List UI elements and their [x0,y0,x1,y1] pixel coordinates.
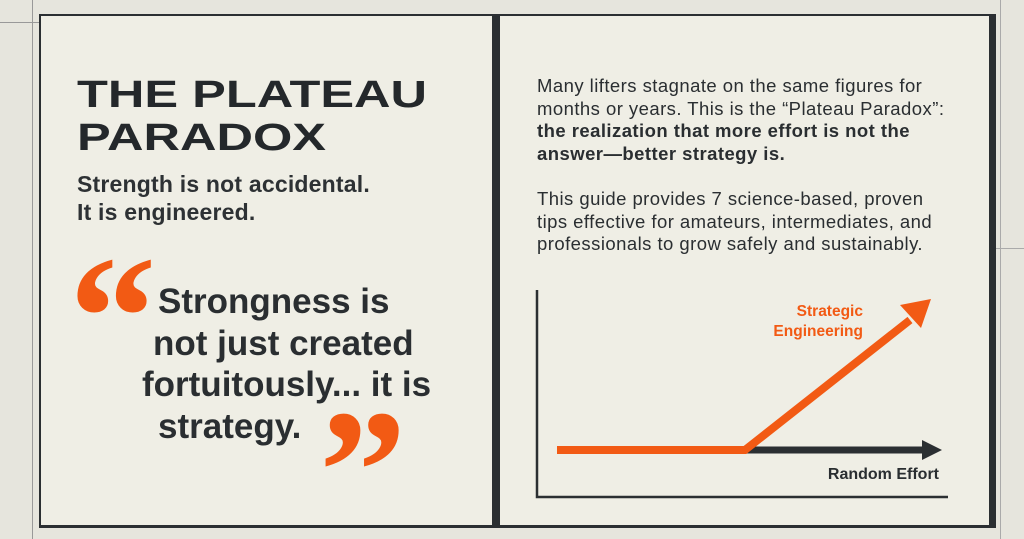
intro text: the realization that more effort is not the [537,120,910,141]
guide text [537,188,932,254]
quote text: Strongness is [158,282,389,321]
label: random effort: Random Effort [828,466,940,483]
quote text: strategy. [158,406,301,446]
arrow: strategic engineering [557,299,931,450]
quote text: fortuitously... it is [142,365,431,404]
guide text: This guide provides 7 science-based, proven [537,188,923,209]
axes [537,290,948,497]
guide text: professionals to grow safely and sustainably. [537,233,923,254]
label: strategic engineering [773,303,863,340]
panel: left [69,74,431,524]
label: strategic engineering: Engineering [773,323,863,340]
title: PARADOX [77,117,326,159]
title [77,74,427,159]
guide text: tips effective for amateurs, intermediates, and [537,211,932,232]
intro text: Many lifters stagnate on the same figures for [537,75,922,96]
arrow: random effort [745,440,942,460]
intro text [537,75,944,164]
intro text: answer—better strategy is. [537,143,785,164]
icon: opening quote: “ [69,220,156,414]
title: THE PLATEAU [77,74,427,116]
panel: right [537,75,944,254]
intro text: months or years. This is the “Plateau Paradox”: [537,98,944,119]
quote text [142,282,431,446]
subtitle [77,171,370,225]
quote text: not just created [153,324,414,362]
subtitle: Strength is not accidental. [77,171,370,197]
label: strategic engineering: Strategic [797,303,863,320]
subtitle: It is engineered. [77,199,256,225]
center divider [492,14,500,528]
background grid lines [32,0,33,539]
